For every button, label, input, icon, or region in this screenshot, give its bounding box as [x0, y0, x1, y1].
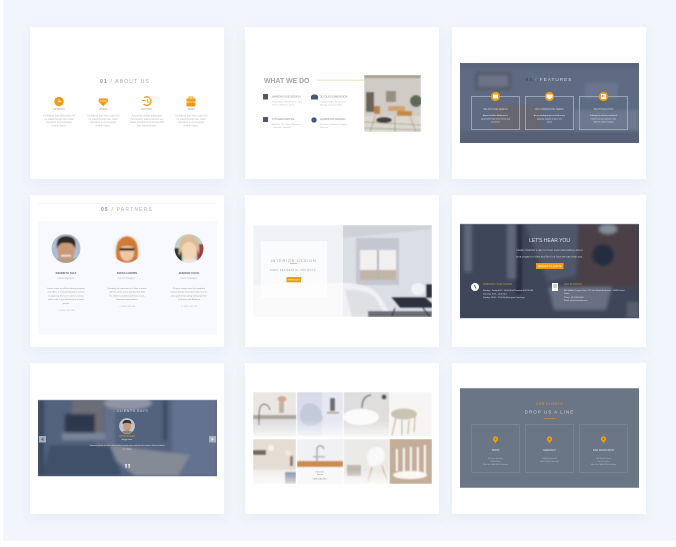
office: paris — [472, 424, 520, 472]
column text: vision: inspiration to a completely — [90, 121, 117, 124]
column text: team: be raised through their initial — [177, 118, 206, 121]
partner: kenneth diaz: Interior Designer — [58, 277, 75, 280]
partner: kenneth diaz: Louise leads an all-first design projects — [47, 287, 86, 290]
office: germany — [526, 424, 574, 472]
icon: building — [552, 283, 558, 291]
partner: diana harris: her clients to understand their needs, — [109, 294, 145, 298]
hero subheading: FIRST RESIDENTIAL PROJECTS — [270, 269, 316, 272]
panel: interior design hero — [245, 195, 439, 347]
service: kitchen rental: KITCHEN RENTAL — [272, 117, 295, 121]
column text: team: Confidence that their project will — [175, 114, 208, 118]
gallery tile: stool — [390, 392, 432, 436]
partner: kenneth diaz — [47, 271, 86, 312]
quote mark: ” — [124, 461, 131, 478]
feature card: right solution — [580, 92, 628, 130]
icon: history — [142, 97, 151, 105]
feature card: right solution: interiors to your private room — [591, 118, 617, 120]
feature card: we understand: property tailored to your new — [537, 118, 563, 120]
panel: what we do — [245, 27, 439, 179]
column text: vision: finished home. — [96, 125, 111, 127]
service: kitchen rental: Adaptive Tile, Office, Warehouse — [272, 123, 303, 126]
feature card: we provide design — [472, 92, 520, 130]
testimonial: Laborum ipsum sit dolor ut ad minim veniam quis nostrud exercitation ullamco laboris — [89, 444, 165, 447]
avatar: blonde woman — [174, 234, 204, 264]
service: kitchen rental: , Industrial, Grounds — [272, 126, 291, 129]
column text: mission — [43, 107, 76, 127]
column text: vision: VISION — [99, 107, 108, 111]
office: germany: 10117 Berlin Germany — [540, 460, 559, 463]
hero heading: INTERIOR DESIGN — [271, 259, 316, 263]
opening hours: OPENING YOUR HOURS — [483, 283, 512, 286]
service: hands-on design: Structure, Hardware, Heights, — [320, 123, 348, 126]
gallery tile: pendant lights — [390, 439, 432, 484]
gallery tile: pendant kitchen — [253, 439, 296, 484]
service: 3d tiles: Roofing, Inspection Arts — [320, 104, 342, 106]
office: san francisco: 501 Market Street — [596, 457, 611, 460]
column text: history: their finished home. — [137, 124, 157, 127]
feature card: we understand: home — [547, 122, 553, 124]
service: hands-on design: HANDS-ON DESIGN — [320, 117, 345, 121]
office: germany: GERMANY — [543, 448, 556, 452]
panel: features — [452, 27, 646, 179]
opening hours: Sunday: 10.00 - 15.00 By Meet your Concierge — [483, 296, 526, 299]
gallery caption: Bathroom — [316, 470, 325, 474]
partner: kenneth diaz: KENNETH DIAZ — [56, 271, 77, 275]
button — [286, 277, 301, 282]
partner: kenneth diaz: and offers a very personalised service — [48, 291, 85, 294]
photo: living room — [364, 75, 422, 132]
partner: kenneth diaz: and so too is the architecture of each — [48, 298, 85, 301]
white overlay — [253, 225, 343, 286]
service: warehouse design: WAREHOUSE DESIGN — [272, 94, 301, 98]
office: san francisco: San Francisco — [597, 460, 610, 463]
feature card: we understand: An exceeding project and attractive — [534, 114, 566, 117]
panel: drop us a line — [452, 363, 646, 514]
column text: mission: MISSION — [54, 107, 65, 111]
column text: mission: inspiration to a completely — [46, 121, 73, 124]
service: warehouse design: Interior, Windows, Doors — [272, 104, 295, 106]
gallery tile: white chair — [297, 392, 343, 437]
service: 3d tiles: Transportation, Temperature, — [320, 100, 347, 104]
panel: clients say — [30, 363, 224, 514]
button: VIEW MORE — [288, 280, 300, 282]
button: REQUEST A QUOTE — [538, 265, 562, 268]
feature card: we provide design: WE PROVIDE DESIGN — [483, 109, 508, 111]
partner: jennifer cock — [171, 271, 208, 308]
avatar: woman with glasses — [112, 234, 142, 264]
service: hands-on design: Forecast — [320, 126, 329, 129]
opening hours: Saturday: 8.00 - 14.00 Sun — [483, 292, 507, 296]
office: paris: Mon-Sat: 9AM-6PM Saturday — [483, 463, 508, 466]
service: 3d tiles — [311, 94, 348, 106]
background photo: dining room — [38, 396, 217, 476]
column text: team — [175, 107, 208, 127]
contact info: GET IN TOUCH — [564, 283, 582, 286]
service: 3d tiles: 3D TILES DIMENSION — [320, 94, 348, 98]
icon: clock — [54, 97, 64, 106]
partner: jennifer cock: JENIFER COCK — [179, 271, 199, 275]
partner: diana harris: Knowing the importance of how a space — [108, 287, 147, 290]
client name — [119, 435, 135, 441]
feature card: right solution: with the perfect layouts — [593, 120, 614, 124]
partner: diana harris: +1 (987) 432 248 — [119, 306, 136, 308]
column text: history: Accessible design and project — [132, 114, 163, 118]
contact info: 880 Hidden Canyon Suite 752, Fort Worth Boulevard - 14600 United — [564, 289, 624, 292]
heading: features: 03 / FEATURES — [526, 77, 572, 82]
feature card: right solution: A design for the finest finished — [590, 114, 617, 117]
column text: team: finished home. — [184, 125, 199, 127]
team background — [38, 221, 217, 335]
heading: what we do: WHAT WE DO — [264, 78, 310, 85]
partner: jennifer cock: interior design of London town houses — [171, 291, 208, 294]
service: hands-on design — [311, 117, 348, 129]
client name: JOHN MILLER — [119, 435, 135, 438]
heading: clients say: / CLIENTS SAYS — [114, 409, 148, 413]
column text: history: clients network and finished plans — [130, 121, 165, 124]
column text: vision: Confidence that their project will — [87, 114, 120, 118]
column text: history: HISTORY — [141, 107, 153, 111]
client avatar — [119, 418, 135, 434]
gallery caption: Interior — [317, 473, 323, 476]
partner: kenneth diaz: +1 (987) 432 248 — [58, 310, 75, 312]
panel: let's hear you — [452, 195, 646, 347]
testimonial: nisi aliquip — [122, 448, 133, 450]
partner: kenneth diaz: project — [63, 302, 70, 305]
feature card: right solution: RIGHT SOLUTION — [594, 109, 614, 111]
office: germany: Schlossstrasse 12 — [542, 457, 557, 460]
intro text: Nearly finished a day for free! Let's start talking about — [516, 248, 583, 252]
gallery caption — [313, 470, 328, 480]
service: warehouse design: Paint Repair, Wood Frame, Tiles — [272, 100, 302, 104]
feature card: we understand: WE UNDERSTAND NEEDS — [535, 108, 564, 111]
panel: partners — [30, 195, 224, 347]
partner: diana harris: will be used, Louise spends time with — [109, 291, 146, 294]
office: san francisco: Mon-Sat: 9AM-6PM Saturday — [591, 463, 616, 466]
column text: history: coordination tailored around our — [131, 118, 163, 121]
heading: drop us a line: DROP US A LINE — [525, 410, 574, 414]
partner: kenneth diaz: recognising that each client is unique — [48, 294, 85, 298]
icon: clock — [471, 283, 479, 291]
partner: diana harris: DIANA HARRIS — [117, 271, 137, 275]
office: san francisco — [580, 424, 628, 472]
column text: team: TEAM — [187, 107, 195, 111]
column text: mission: Confidence that their project will — [43, 114, 76, 118]
contact info: Email: info@example.com — [564, 300, 588, 302]
panel: gallery — [245, 363, 439, 514]
column text: vision — [87, 107, 120, 127]
partner: diana harris — [108, 271, 147, 308]
testimonial — [89, 444, 165, 450]
partner: jennifer cock: Projects range from the complete — [173, 287, 206, 290]
column text: mission: finished home. — [52, 125, 67, 127]
photo: bedroom — [253, 225, 432, 317]
gallery tile: kitchen tap — [253, 392, 296, 437]
icon: briefcase — [186, 97, 196, 106]
client name: Happy client — [122, 438, 133, 441]
contact info: Phone: 00 000000000 — [564, 297, 585, 299]
feature card: we provide design: apartments their more items and — [481, 118, 510, 120]
background photo: bathroom — [460, 224, 639, 318]
contact info: States — [564, 292, 570, 295]
partner: jennifer cock: +1 (987) 432 248 — [181, 306, 198, 308]
opening hours: Monday - Friday 8.00 - 18.00 (Sun/Thursday 8.00-20.00) — [483, 290, 533, 292]
office: paris: 75001 Paris — [490, 460, 501, 463]
accent line — [317, 79, 364, 82]
feature card: we provide design: Above facilities Bedroom for — [483, 114, 508, 117]
gallery tile: chrome tap — [297, 439, 343, 468]
heading: partners: 05 / PARTNERS — [101, 207, 153, 213]
arrow: next — [209, 436, 216, 442]
office: paris: PARIS — [492, 448, 500, 452]
heading: let's hear you: LET'S HEAR YOU — [529, 238, 570, 244]
icon: diamond heart — [98, 98, 108, 106]
column text: history — [130, 107, 165, 127]
gallery caption: VIEW GALLERY — [313, 478, 328, 480]
office: paris: 401 Rue de Rivoli — [488, 458, 504, 460]
feature card: we provide design: new items — [491, 120, 500, 124]
partner: jennifer cock: Interior Designer — [181, 277, 198, 280]
column text: team: inspiration to a completely — [178, 121, 205, 124]
gallery tile: eames chair — [344, 439, 390, 484]
partner: jennifer cock: and apartments along with properties — [171, 294, 208, 298]
heading: about us: 01 / ABOUT US — [100, 79, 150, 85]
column text: mission: be raised through their initial — [45, 118, 74, 121]
avatar: man — [51, 234, 81, 264]
gallery tile: wash basin — [343, 392, 390, 437]
arrow: previous — [39, 436, 46, 442]
column text: vision: be raised through their initial — [89, 118, 118, 121]
intro text — [516, 248, 583, 258]
partner: diana harris: Interior Designer — [119, 277, 136, 280]
feature card: we understand — [526, 92, 574, 130]
partner: jennifer cock: in France and Mallorca — [178, 298, 201, 301]
panel: about us — [30, 27, 224, 179]
contact background — [460, 388, 639, 488]
service: kitchen rental — [263, 117, 303, 129]
button — [536, 263, 564, 269]
service: warehouse design — [263, 94, 302, 106]
kicker: OUR CLIENTS — [536, 402, 563, 406]
office: san francisco: SAN FRANCISCO — [593, 448, 614, 452]
opening hours — [483, 283, 533, 299]
contact info — [564, 283, 624, 302]
intro text: your project or idea and find out how we can help you. — [516, 254, 583, 258]
background photo: kitchen — [460, 63, 639, 143]
partner: diana harris: foreseen expectations — [116, 298, 139, 301]
